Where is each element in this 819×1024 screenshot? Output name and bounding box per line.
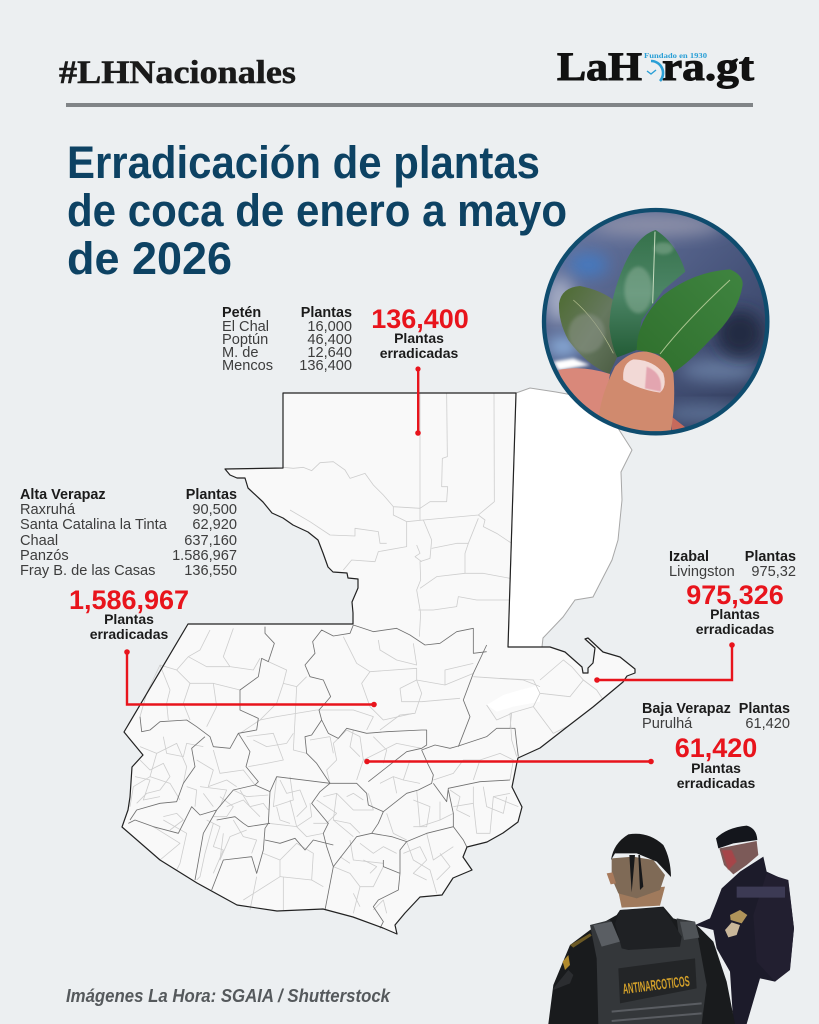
callout line: Izabal — [594, 642, 735, 683]
text block: Izabal table: 975,32 — [751, 564, 796, 580]
map outer border — [122, 393, 635, 934]
logo: La Hora.gt — [557, 44, 755, 89]
callout total: Alta Verapaz — [69, 585, 189, 642]
text block: Petén table: 16,000 — [307, 319, 352, 335]
callout total: Petén: erradicadas — [380, 345, 459, 361]
callout total: Baja Verapaz: Plantas — [691, 760, 741, 776]
title: de 2026 — [67, 233, 232, 284]
text block: Petén table: Mencos — [222, 358, 273, 374]
icon: map of Belize (white) — [508, 388, 632, 647]
footer credit: Imágenes La Hora: SGAIA / Shutterstock — [66, 986, 391, 1006]
callout total: Petén: Plantas — [394, 330, 444, 346]
callout total: Izabal: Plantas — [710, 606, 760, 622]
text block: Alta Verapaz table: Chaal — [20, 533, 58, 549]
callout total: Izabal: erradicadas — [696, 621, 775, 637]
callout total: Izabal — [686, 580, 784, 637]
photo: coca leaves in circle — [540, 207, 773, 440]
callout line: Alta Verapaz — [124, 649, 377, 707]
callout total: Petén — [371, 304, 469, 361]
officer in background — [695, 826, 794, 1024]
text block: Petén table — [222, 305, 352, 374]
text block: Alta Verapaz table: Fray B. de las Casas — [20, 563, 155, 579]
left leaf — [559, 286, 617, 374]
callout total: Izabal: 975,326 — [686, 580, 784, 610]
callout line: Baja Verapaz — [364, 759, 654, 764]
text block: Alta Verapaz table: Plantas — [186, 487, 237, 503]
map of Guatemala — [122, 393, 635, 934]
text block: Petén table: Poptún — [222, 332, 268, 348]
photo: anti-narcotics officers — [548, 826, 794, 1024]
officer in foreground — [548, 834, 735, 1024]
text block: Izabal table: Plantas — [745, 549, 796, 565]
text block: Alta Verapaz table: 637,160 — [184, 533, 237, 549]
logo: La Hora.gt: Fundado en 1930 — [644, 51, 707, 60]
text block: Alta Verapaz table: 90,500 — [192, 502, 237, 518]
text block: Alta Verapaz table: Santa Catalina la Tinta — [20, 517, 168, 533]
text block: Petén table: Petén — [222, 305, 261, 321]
callout total: Alta Verapaz: Plantas — [104, 611, 154, 627]
callout line: Petén — [415, 366, 421, 436]
callout total: Baja Verapaz — [675, 733, 757, 791]
text block: Petén table: Plantas — [301, 305, 352, 321]
text block: Petén table: 12,640 — [307, 345, 352, 361]
text block: Alta Verapaz table — [20, 487, 237, 579]
callout total: Alta Verapaz: erradicadas — [90, 626, 169, 642]
text block: Petén table: M. de — [222, 345, 258, 361]
text block: Izabal table — [669, 549, 796, 580]
text block: Baja Verapaz table: Baja Verapaz — [642, 701, 731, 717]
text block: Baja Verapaz table: Purulhá — [642, 716, 693, 732]
text block: Baja Verapaz table: 61,420 — [745, 716, 790, 732]
northern Petén municipal lines — [283, 393, 512, 637]
text block: Baja Verapaz table — [642, 701, 790, 732]
text block: Izabal table: Livingston — [669, 564, 735, 580]
text block: Izabal table: Izabal — [669, 549, 709, 565]
callout total: Alta Verapaz: 1,586,967 — [69, 585, 189, 615]
logo: La Hora.gt: ra.gt — [662, 44, 755, 89]
title: Erradicación de plantas — [67, 137, 540, 188]
text block: Alta Verapaz table: Raxruhá — [20, 502, 76, 518]
title: de coca de enero a mayo — [67, 185, 567, 236]
text block: Petén table: El Chal — [222, 319, 269, 335]
callout total: Petén: 136,400 — [371, 304, 469, 334]
hashtag heading: #LHNacionales — [59, 55, 296, 91]
text block: Petén table: 46,400 — [307, 332, 352, 348]
text block: Petén table: 136,400 — [299, 358, 352, 374]
vest label: ANTINARCOTICOS — [622, 974, 691, 998]
southern municipal lines — [128, 625, 540, 928]
middle leaf — [609, 230, 685, 357]
text block: Alta Verapaz table: Panzós — [20, 548, 69, 564]
hand — [558, 368, 610, 416]
logo: La Hora.gt: LaH — [557, 44, 642, 89]
right leaf — [637, 269, 743, 373]
text block: Alta Verapaz table: 62,920 — [192, 517, 237, 533]
text block: Alta Verapaz table: 1.586,967 — [172, 548, 237, 564]
Izabal municipal lines — [500, 660, 603, 757]
callout total: Baja Verapaz: erradicadas — [677, 775, 756, 791]
map fill and outline — [122, 393, 635, 934]
text block: Baja Verapaz table: Plantas — [739, 701, 790, 717]
title — [67, 137, 567, 284]
callout total: Baja Verapaz: 61,420 — [675, 733, 757, 763]
text block: Alta Verapaz table: Alta Verapaz — [20, 487, 106, 503]
text block: Alta Verapaz table: 136,550 — [184, 563, 237, 579]
